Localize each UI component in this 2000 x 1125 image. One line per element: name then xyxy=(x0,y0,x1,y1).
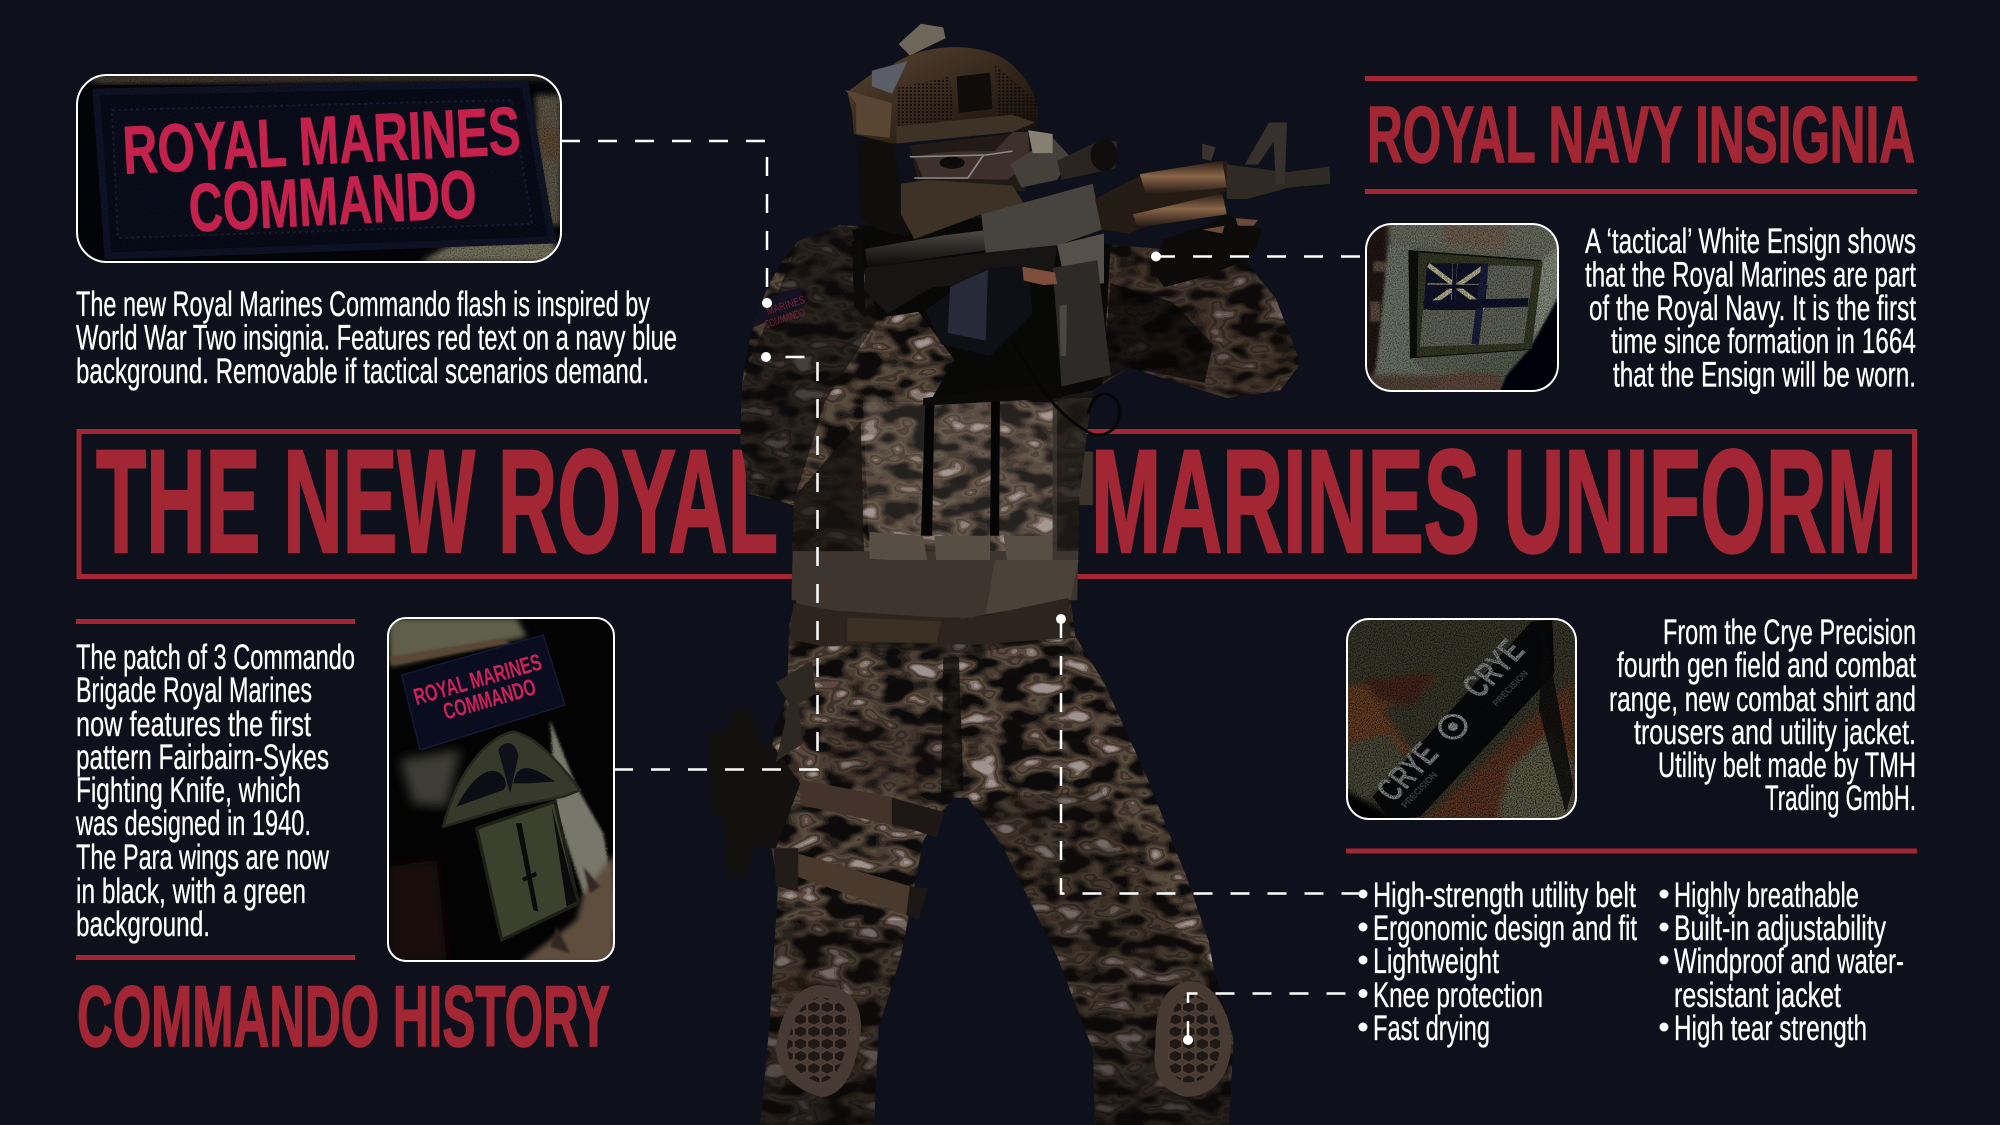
divider above feature list xyxy=(1346,848,1917,854)
list: features column two: High tear strength xyxy=(1674,1009,1867,1048)
panel: commando patches photo: COMMANDO xyxy=(440,674,539,725)
panel: white ensign photo xyxy=(1365,223,1559,392)
torso and arms xyxy=(740,218,1300,600)
hands and gloves xyxy=(925,214,1262,435)
trousers xyxy=(760,600,1234,1125)
ensign patch xyxy=(1408,250,1543,358)
woven logo: PRECISION xyxy=(1399,770,1440,810)
sleeve flash lettering: COMMANDO xyxy=(763,307,807,331)
para wings patch xyxy=(443,732,580,827)
main title text: THE NEW ROYAL xyxy=(96,420,778,584)
woven logo: CRYE xyxy=(1455,633,1533,705)
panel: commando patches photo xyxy=(387,617,617,963)
text: commando patch description: The patch of 3 Commando xyxy=(76,638,355,677)
list: features column two: Highly breathable xyxy=(1674,876,1859,915)
list: features column one: Knee protection xyxy=(1373,976,1543,1015)
main title frame xyxy=(79,420,1914,584)
woven label band xyxy=(1373,620,1554,820)
sleeve flash lettering xyxy=(759,294,811,331)
list: features column one: Lightweight xyxy=(1373,942,1499,981)
knee pads xyxy=(776,981,1231,1097)
list: features column two xyxy=(1660,876,1904,1048)
sleeve flash lettering: MARINES xyxy=(765,294,807,318)
text: commando patch description: in black, with a green xyxy=(76,872,306,911)
text: ensign description xyxy=(1585,222,1916,394)
text: commando patch description xyxy=(75,619,355,960)
text: flash description: background. Removable if tactical scenarios demand. xyxy=(76,352,649,391)
text: commando patch description: Brigade Royal Marines xyxy=(76,671,312,710)
list: features column two: Windproof and water- xyxy=(1674,942,1904,981)
text: commando patch description: background. xyxy=(76,905,210,944)
list: features column two: Built-in adjustability xyxy=(1674,909,1886,948)
shoulder flash on sleeve xyxy=(754,287,805,327)
text: commando patch description: The Para wings are now xyxy=(76,838,329,877)
text: crye precision description xyxy=(1609,613,1916,818)
rifle xyxy=(852,122,1330,387)
text: flash description: World War Two insignia. Features red text on a navy blue xyxy=(76,318,677,358)
panel: crye precision photo xyxy=(1340,617,1577,827)
fighting knife patch xyxy=(477,802,578,940)
woven logo: CRYE xyxy=(1369,737,1447,808)
list: features column one xyxy=(1358,876,1637,1048)
holster and thigh straps xyxy=(709,661,945,920)
helmet and head xyxy=(845,24,1038,239)
list: features column one: Fast drying xyxy=(1373,1009,1490,1048)
heading: royal navy insignia xyxy=(1365,76,1917,194)
connector: white ensign to arm xyxy=(1151,252,1366,262)
text: commando patch description: was designed in 1940. xyxy=(75,804,311,843)
text: flash description: The new Royal Marines Commando flash is inspired by xyxy=(76,285,650,324)
flash lettering xyxy=(124,106,520,232)
rear cord and pouch xyxy=(1071,452,1093,505)
t-shirt and belt xyxy=(789,560,1079,646)
woven logo: PRECISION xyxy=(1490,669,1531,708)
connector: utility belt to feature list xyxy=(1056,614,1363,894)
flash lettering: COMMANDO xyxy=(187,156,478,247)
text: commando patch description: now features the first xyxy=(76,705,311,744)
text: commando patch description: Fighting Knife, which xyxy=(76,771,301,810)
text: crye precision description: Trading GmbH. xyxy=(1765,779,1916,818)
panel: commando patches photo: ROYAL MARINES xyxy=(411,649,544,710)
soldier figure xyxy=(700,0,1350,1125)
text: commando patch description: pattern Fairbairn-Sykes xyxy=(76,738,329,777)
connector: knee pad to feature list xyxy=(1183,994,1363,1045)
list: features column one: Ergonomic design and fit xyxy=(1373,909,1637,948)
heading: commando history: COMMANDO HISTORY xyxy=(77,969,610,1065)
text: flash description xyxy=(76,285,677,391)
woven logo xyxy=(1369,633,1533,810)
connector: commando patch to sleeve xyxy=(614,352,818,770)
list: features column two: resistant jacket xyxy=(1674,976,1841,1015)
navy shoulder flash xyxy=(402,635,565,750)
connector: commando flash to sleeve xyxy=(561,141,772,308)
panel: commando flash photo xyxy=(77,75,561,262)
list: features column one: High-strength utility belt xyxy=(1373,876,1636,915)
flash lettering: ROYAL MARINES xyxy=(121,93,522,189)
